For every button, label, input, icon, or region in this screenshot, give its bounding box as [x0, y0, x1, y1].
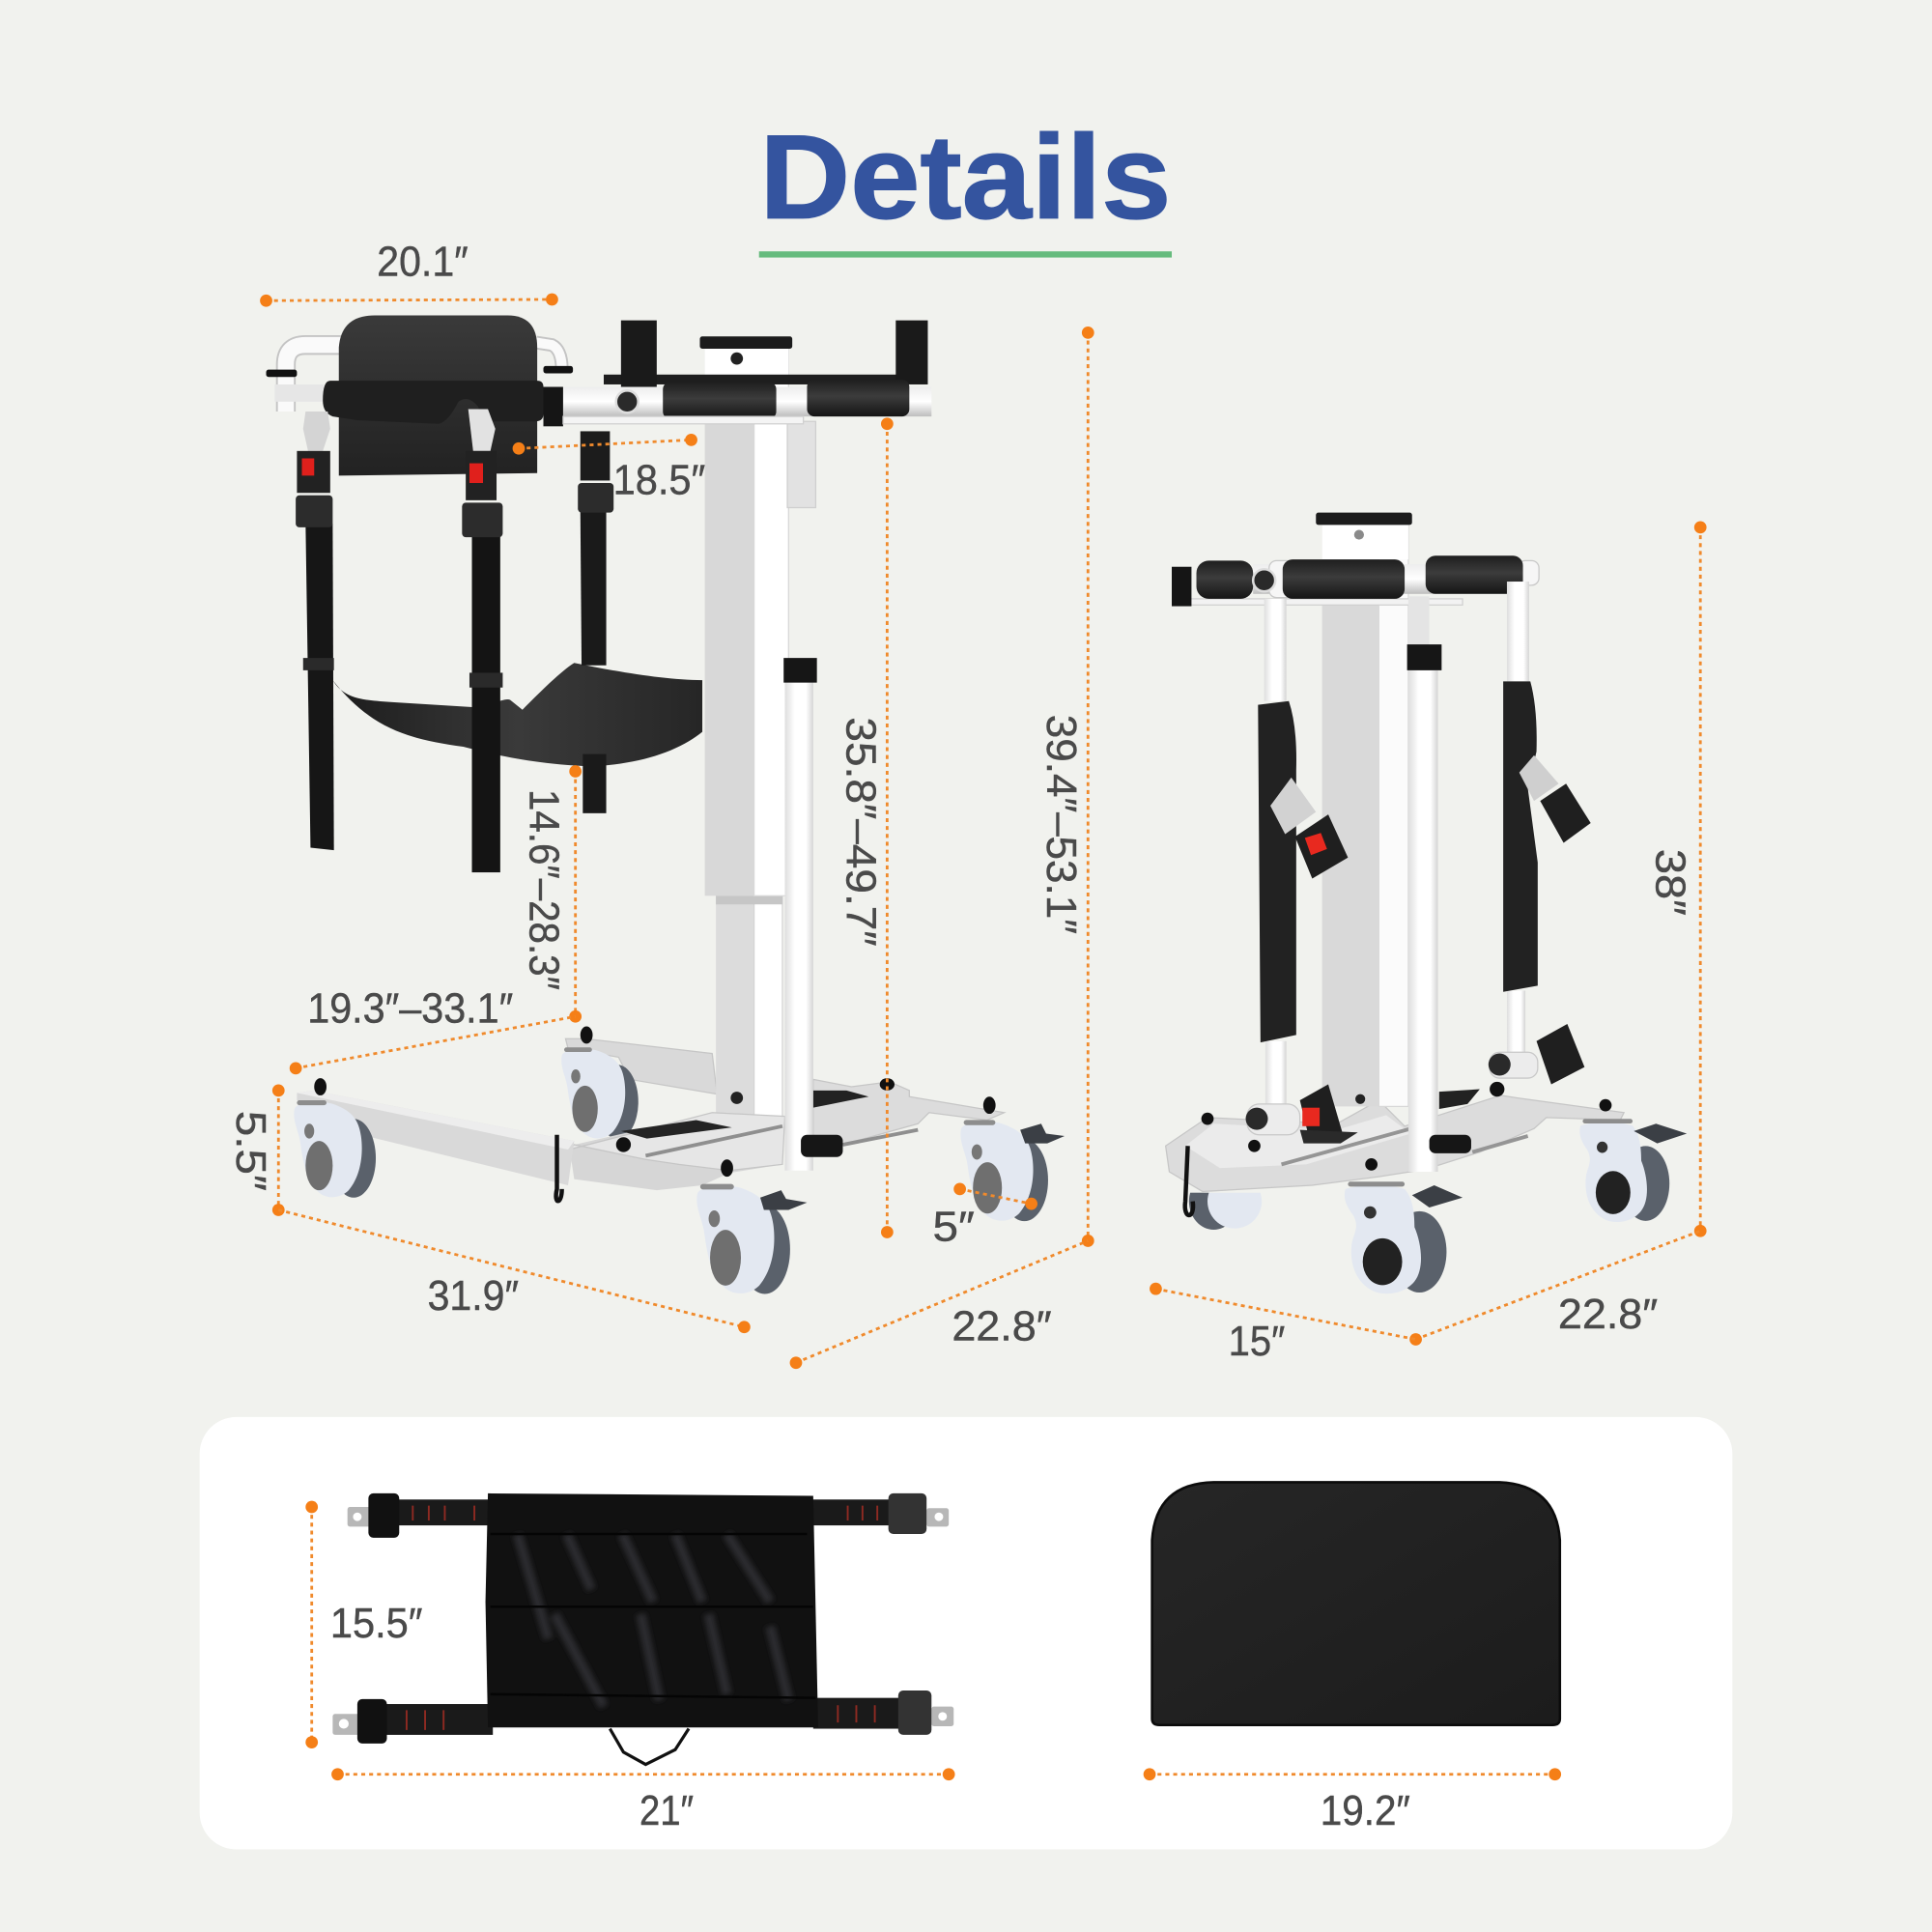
- rods: [645, 1126, 918, 1155]
- dimension 18.5 inches: 18.5″: [613, 456, 705, 503]
- backrest: [339, 316, 537, 475]
- rear arm knob: [581, 1026, 593, 1043]
- caster front: [1345, 1181, 1446, 1293]
- sling seam: [491, 1534, 815, 1698]
- dimension 38 inches: 38″: [1646, 849, 1693, 916]
- caster front right: [696, 1184, 790, 1293]
- under bar strip: [1190, 599, 1463, 605]
- metal tabs: [332, 1507, 953, 1735]
- foam centre: [1283, 559, 1405, 599]
- title underline: [759, 251, 1172, 258]
- seat pad: [1152, 1482, 1560, 1725]
- dimension 19.3 to 33.1 inches: 19.3″–33.1″: [307, 985, 513, 1033]
- sling folds: [518, 1534, 788, 1707]
- caster front left: [294, 1100, 376, 1198]
- strap left: [296, 412, 334, 850]
- brake lever right: [1634, 1123, 1687, 1144]
- knob rear right: [983, 1096, 996, 1114]
- front post: [1407, 596, 1441, 1172]
- dimension 14.6 to 28.3 inches: 14.6″–28.3″: [520, 789, 567, 990]
- knob front right: [721, 1159, 733, 1177]
- brake lever front right: [760, 1190, 807, 1210]
- knob front left arm: [314, 1078, 327, 1095]
- joint right: [1518, 560, 1539, 585]
- handle tube: [1253, 564, 1526, 594]
- left upper bracket and buckle: [1270, 778, 1348, 878]
- handle loop: [610, 1729, 689, 1765]
- grip post left: [621, 321, 657, 387]
- caster right: [1579, 1119, 1669, 1222]
- lanyard: [1185, 1146, 1193, 1215]
- dimension 38 inches: [1646, 522, 1707, 1237]
- dimension 20.1 inches: [260, 239, 558, 307]
- hub: [616, 390, 639, 412]
- dimension 31.9 inches: 31.9″: [428, 1272, 519, 1320]
- strap middle: [462, 409, 502, 872]
- front post: [783, 658, 817, 1171]
- upper column: [699, 336, 792, 895]
- base back arm: [565, 1038, 717, 1094]
- foam left: [1197, 560, 1253, 599]
- joint left: [1269, 560, 1293, 598]
- red stitching: [407, 1506, 877, 1730]
- dimension 22.8 inches side: [790, 1240, 1088, 1369]
- rods: [1282, 1128, 1528, 1164]
- left arm post: [1246, 599, 1300, 1135]
- caster rear right: [960, 1120, 1048, 1221]
- grip post right: [895, 321, 927, 384]
- dimension 39.4 to 53.1 inches: 39.4″–53.1″: [1037, 715, 1085, 934]
- dimension 21 inches: [331, 1768, 955, 1834]
- dimension 15.5 inches: [305, 1501, 423, 1748]
- spring: [1430, 1135, 1471, 1153]
- base top plate: [1185, 1115, 1410, 1168]
- dimension 19.2 inches: [1144, 1768, 1561, 1834]
- white bar underside plate: [563, 416, 804, 424]
- dimension 39.4 to 53.1 inches: [1037, 327, 1094, 1247]
- handle bar tube: [563, 387, 931, 416]
- white armrest frame left: [286, 345, 341, 412]
- tab holes: [339, 1513, 947, 1729]
- lower column: [716, 891, 782, 1119]
- column: [1316, 513, 1412, 1106]
- dimension 22.8 inches side: 22.8″: [952, 1303, 1052, 1350]
- dimension 5 inches wheel: [933, 1182, 1037, 1250]
- base frame: [1166, 1095, 1624, 1191]
- strap back: [578, 431, 613, 813]
- sling panel: [486, 1493, 818, 1727]
- foam right: [1426, 555, 1523, 594]
- knobs: [1202, 1082, 1611, 1171]
- brake lever front: [1412, 1185, 1463, 1208]
- straps: [370, 1499, 902, 1735]
- back sling harness: [332, 1493, 953, 1765]
- dimension 18.5 inches: [513, 434, 705, 503]
- rear caster left: [561, 1047, 639, 1139]
- right base arm: [813, 1079, 1005, 1150]
- rear left caster: [1182, 1171, 1269, 1230]
- knob center: [880, 1078, 895, 1091]
- control box: [787, 421, 815, 508]
- dimension 15.5 inches: 15.5″: [330, 1600, 423, 1647]
- white details panel: [200, 1417, 1732, 1850]
- dimension 31.9 inches: [278, 1210, 751, 1333]
- spring: [801, 1135, 842, 1157]
- left lift machine, side view: [267, 316, 1065, 1293]
- dimension 5 inches wheel: 5″: [933, 1203, 975, 1250]
- lanyard: [556, 1135, 562, 1201]
- dimension 20.1 inches: 20.1″: [377, 239, 469, 286]
- dimension 22.8 inches front: [1409, 1231, 1700, 1346]
- dimension 35.8 to 49.7 inches: [837, 417, 894, 1238]
- hub: [1253, 569, 1275, 591]
- sling seat: [332, 663, 702, 766]
- right upper bracket and buckle: [1520, 755, 1591, 842]
- knob front: [616, 1137, 631, 1152]
- left lower buckle: [1300, 1084, 1358, 1144]
- dimension 19.3 to 33.1 inches: [290, 985, 576, 1074]
- dimension 22.8 inches front: 22.8″: [1558, 1291, 1658, 1338]
- dimension 35.8 to 49.7 inches: 35.8″–49.7″: [837, 717, 884, 947]
- armrest pad: [323, 381, 543, 424]
- dimension 5.5 inches: [227, 1084, 285, 1216]
- dimension 15 inches: [1150, 1283, 1416, 1365]
- central platform: [569, 1113, 784, 1171]
- dimension 19.2 inches: 19.2″: [1321, 1787, 1410, 1834]
- armrest rings: [267, 366, 573, 377]
- strap buckles: [357, 1493, 931, 1744]
- dimension 15 inches: 15″: [1229, 1318, 1285, 1365]
- front footplate: [621, 1120, 732, 1139]
- back bar: [604, 375, 899, 384]
- handle foam one: [663, 382, 777, 419]
- handle foam two: [807, 380, 909, 416]
- dimension 21 inches: 21″: [639, 1787, 694, 1834]
- left armrest stub: [274, 384, 324, 402]
- platform backing: [569, 1113, 784, 1190]
- white armrest frame right: [536, 343, 562, 370]
- right arm post: [1489, 582, 1538, 1078]
- rear footplate: [813, 1091, 868, 1108]
- right lift machine, front view: [1166, 513, 1687, 1293]
- black square tube end: [543, 387, 563, 426]
- rear foot plate: [1439, 1090, 1480, 1109]
- black square end: [1172, 567, 1191, 607]
- front base arm: [297, 1091, 574, 1185]
- title: Details: [759, 111, 1171, 244]
- right lower buckle: [1537, 1024, 1584, 1084]
- dimension 14.6 to 28.3 inches: [520, 765, 582, 1023]
- brake lever rear right: [1020, 1123, 1065, 1144]
- dimension 5.5 inches: 5.5″: [227, 1111, 274, 1191]
